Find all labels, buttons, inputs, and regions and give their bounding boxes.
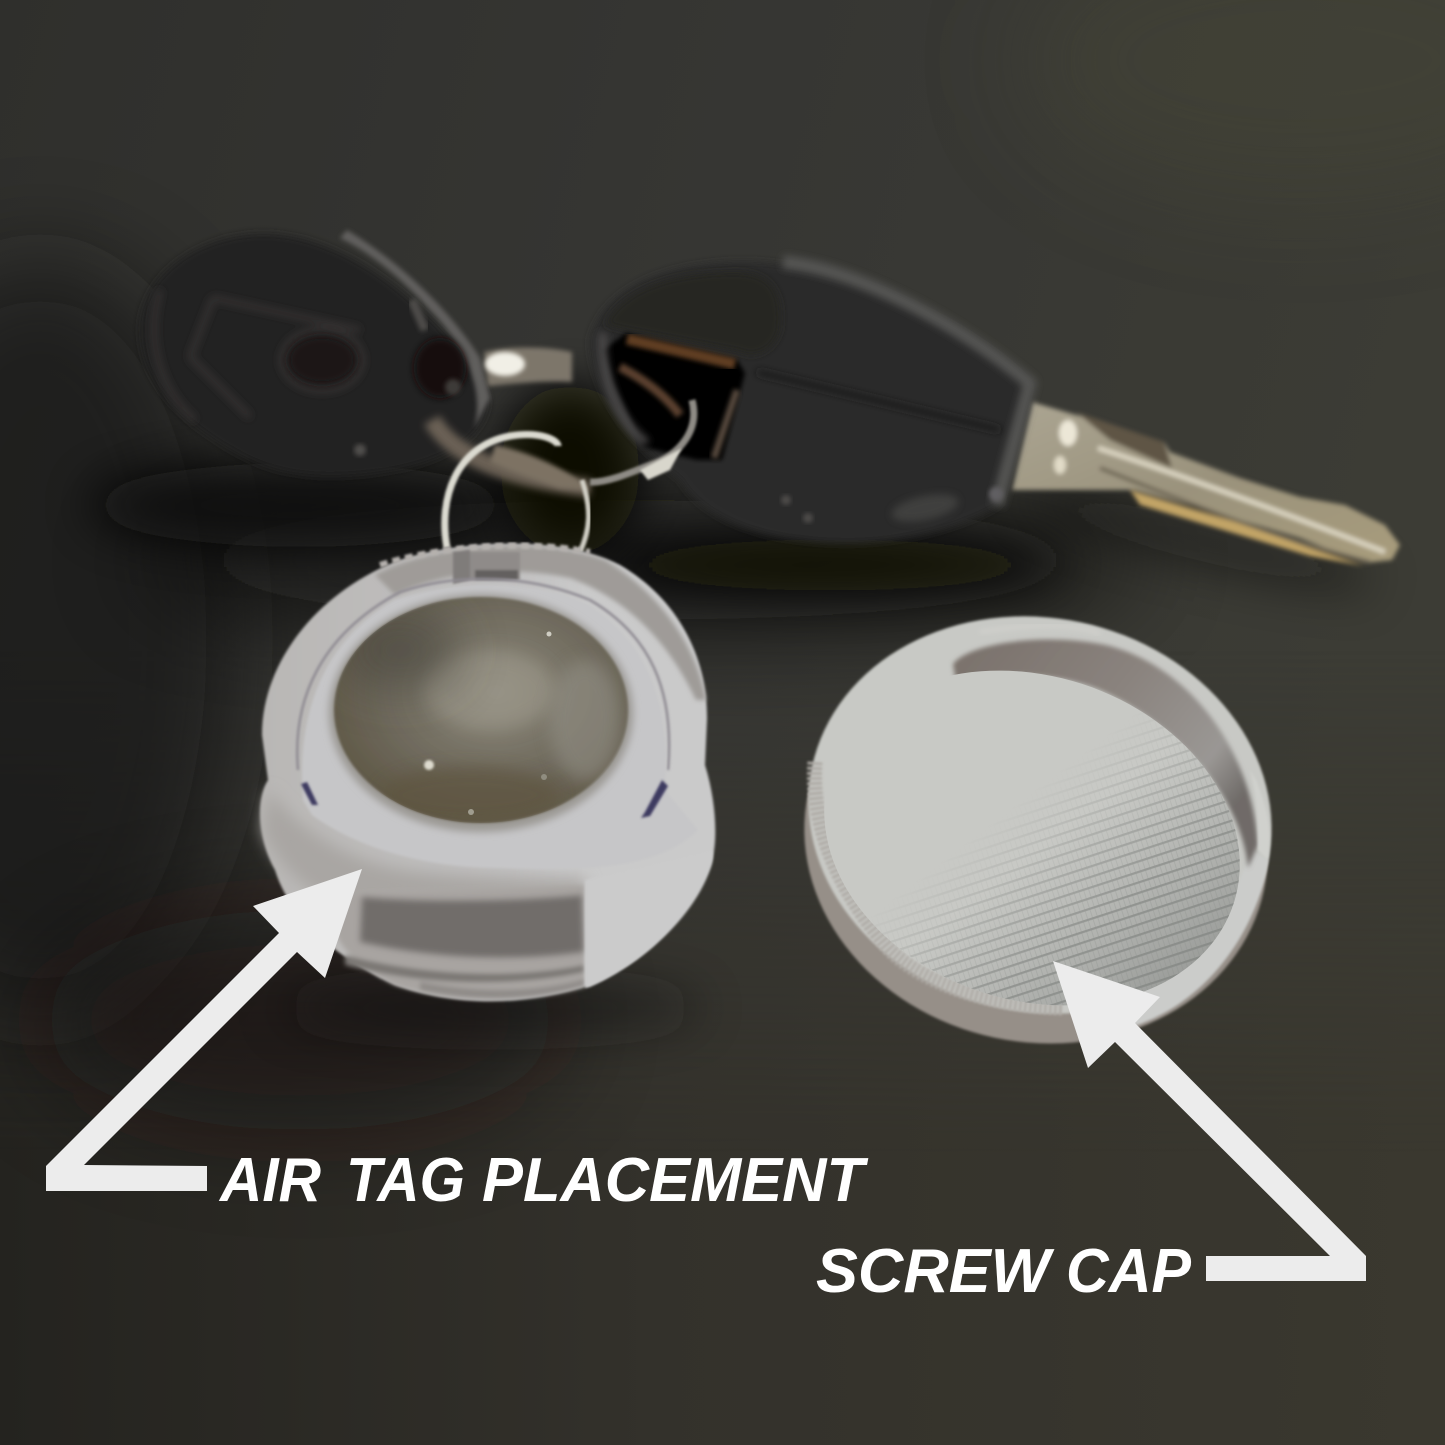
- lower right bright rim: [1100, 850, 1268, 1030]
- slot in the rim: [453, 550, 520, 584]
- floor with print lines: [824, 670, 1240, 1006]
- cap side wall: [767, 598, 1305, 1086]
- gap end marks: [301, 782, 318, 805]
- label: screw cap: SCREW: [816, 1237, 1055, 1306]
- screw cap: [802, 614, 1274, 1045]
- fob key-ring hole: [603, 333, 745, 460]
- lower dark banding on the side wall: [335, 885, 585, 1000]
- overexposed right side: [585, 850, 713, 988]
- rim top shading: [375, 546, 706, 700]
- arrow: air tag placement: [46, 869, 362, 1191]
- left key fob (blurred): [140, 230, 490, 476]
- key blade: [1012, 402, 1400, 566]
- label: air tag placement: TAG: [346, 1146, 465, 1215]
- label: air tag placement: PLACEMENT: [482, 1146, 869, 1215]
- shadow under keys: [90, 385, 1380, 605]
- right rim: [1250, 770, 1270, 860]
- holder body with air tag: [260, 544, 715, 1034]
- label: air tag placement: AIR: [218, 1146, 321, 1215]
- inner gap arc: [297, 579, 669, 770]
- split ring and small loop ring: [432, 400, 694, 552]
- top rim highlight: [980, 626, 1100, 634]
- knurled rim: [814, 762, 1063, 1008]
- label: screw cap: CAP: [1066, 1237, 1192, 1306]
- holder shadow: [280, 982, 700, 1034]
- small highlights on fob: [889, 489, 961, 527]
- metal split ring between fobs: [484, 348, 572, 386]
- recess wall: [953, 640, 1258, 868]
- holder silhouette: [260, 544, 715, 1001]
- label: screw cap: [816, 1237, 1192, 1306]
- lower left shading on cylinder: [262, 790, 585, 905]
- air tag metal disc: [329, 594, 633, 832]
- label: air tag placement: [218, 1146, 869, 1215]
- cap top face: [771, 574, 1309, 1056]
- arrow: screw cap: [1053, 961, 1366, 1281]
- right key fob (blurred): [590, 262, 1030, 543]
- inner cylinder: [302, 585, 698, 869]
